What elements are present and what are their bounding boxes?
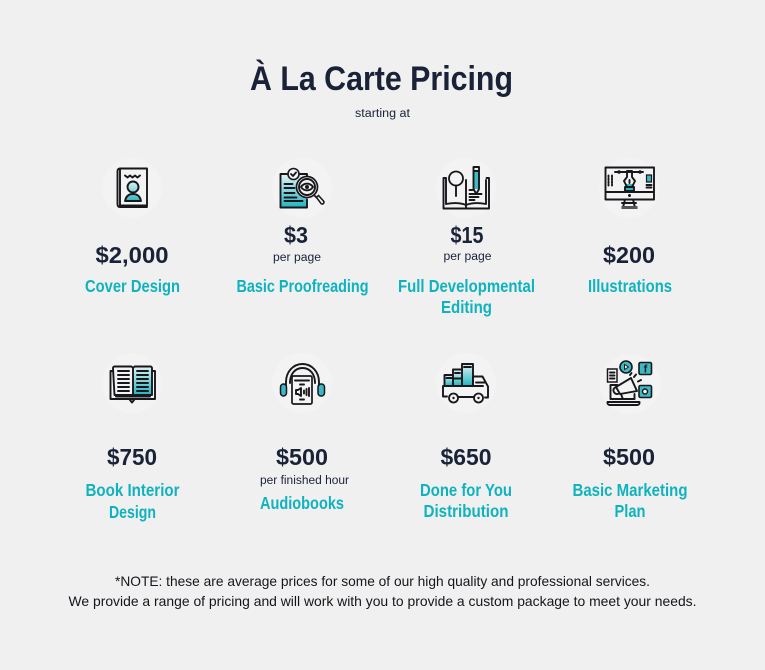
service name: Book Interior (86, 480, 180, 500)
panel: full developmental editing (398, 158, 535, 317)
unit: per finished hour (260, 475, 349, 487)
panel: book interior design (86, 353, 180, 522)
panel: illustrations (588, 158, 672, 296)
subtitle: starting at (355, 108, 411, 120)
service name line 2: Editing (441, 297, 492, 317)
service name line 2: Distribution (424, 501, 508, 521)
icon: book cover (102, 158, 162, 218)
icon: clipboard with magnifier (272, 158, 332, 218)
service name: Cover Design (85, 276, 180, 296)
panel: cover design (85, 158, 180, 296)
service name: Audiobooks (260, 493, 344, 513)
price: $500 (603, 444, 655, 470)
price: $200 (603, 242, 655, 268)
price: $650 (440, 444, 492, 470)
service name: Basic Proofreading (236, 276, 368, 296)
panel: audiobooks (260, 353, 349, 513)
footnote: We provide a range of pricing and will work with you to provide a custom package to meet your needs. (68, 593, 696, 609)
icon: delivery truck (436, 353, 496, 413)
panel: basic proofreading (236, 158, 368, 296)
service name: Illustrations (588, 276, 672, 296)
footnote (68, 573, 696, 609)
service name line 2: Design (109, 502, 156, 522)
unit: per page (273, 252, 321, 264)
price: $500 (276, 444, 328, 470)
service name: Basic Marketing (572, 480, 688, 500)
service name line 2: Plan (614, 501, 646, 521)
icon: monitor with pen tool (599, 158, 659, 218)
title: À La Carte Pricing (250, 60, 513, 98)
icon: headphones with tablet (272, 353, 332, 413)
price: $750 (107, 444, 157, 470)
price: $3 (284, 222, 308, 248)
footnote: *NOTE: these are average prices for some of our high quality and professional services. (115, 573, 650, 589)
service name: Full Developmental (398, 276, 535, 296)
icon: megaphone and social media (600, 354, 660, 414)
price: $15 (450, 222, 484, 248)
service name: Done for You (420, 480, 512, 500)
icon: open book, magnifier, pencil (436, 158, 496, 218)
panel: basic marketing plan (572, 354, 688, 521)
icon: open book with lines (102, 353, 162, 413)
unit: per page (444, 251, 492, 263)
price: $2,000 (96, 242, 168, 268)
icon: megaphone and social media: f (644, 364, 648, 376)
panel: done for you distribution (420, 353, 512, 521)
